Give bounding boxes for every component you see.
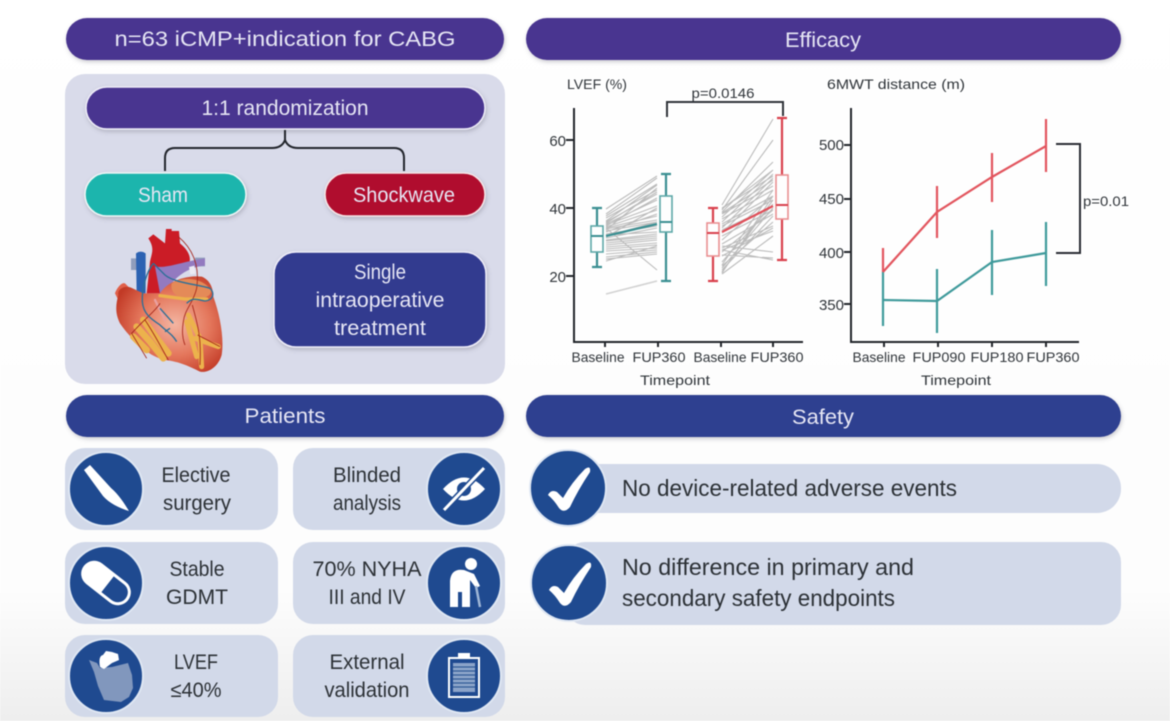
sham boxplots [591, 174, 672, 281]
chart: 6MWT distance [819, 76, 1129, 388]
chart title: LVEF (%) [567, 76, 627, 92]
safety item: no difference in endpoints: secondary safety endpoints [622, 585, 895, 611]
tile: elective surgery [65, 448, 278, 530]
tile: blinded analysis [293, 448, 505, 530]
y labels: 500 [819, 137, 844, 154]
safety item: no difference in endpoints: No difference in primary and [622, 554, 914, 580]
x labels: FUP360 [1026, 349, 1080, 365]
tile: LVEF threshold [65, 635, 278, 717]
tile: blinded analysis: Blinded [333, 464, 401, 487]
shockwave pill [325, 173, 485, 216]
shockwave boxplots [707, 118, 788, 281]
treatment box: treatment [334, 317, 426, 340]
heading: patients: Patients [244, 405, 326, 428]
individual patient lines [606, 119, 773, 294]
safety item: no device-related adverse events [530, 450, 1121, 526]
treatment box: intraoperative [316, 289, 444, 312]
treatment box: Single [354, 261, 406, 284]
y labels: 450 [819, 191, 844, 208]
significance bracket: p=0.0146 [692, 85, 755, 101]
significance bracket [667, 85, 783, 117]
significance bracket: p=0.01 [1083, 193, 1129, 209]
tile: stable GDMT: GDMT [166, 586, 228, 609]
sham series [883, 222, 1046, 333]
sham pill: Sham [138, 184, 188, 207]
icon: check mark [548, 468, 590, 511]
icon: scalpel [84, 465, 129, 511]
heading: population [66, 18, 504, 60]
shockwave pill: Shockwave [353, 184, 455, 207]
tile: blinded analysis: analysis [333, 492, 401, 515]
tile: NYHA class [293, 542, 505, 624]
y labels: 40 [549, 201, 566, 218]
x labels: FUP090 [912, 349, 966, 365]
icon: anatomical heart [115, 229, 222, 372]
y labels [549, 133, 566, 286]
x labels: Timepoint [921, 372, 991, 388]
significance bracket [1056, 144, 1129, 253]
tile: NYHA class: III and IV [328, 586, 406, 609]
icon: check mark [549, 563, 591, 606]
x labels [572, 349, 804, 388]
shockwave series [883, 119, 1046, 272]
x labels: Baseline [572, 349, 625, 365]
heading: efficacy [526, 18, 1121, 60]
icon: clipboard [449, 653, 479, 697]
axes [844, 108, 1079, 347]
x labels: Baseline [852, 349, 906, 365]
tile: stable GDMT: Stable [170, 558, 224, 581]
safety item: no difference in endpoints [531, 542, 1121, 625]
sham pill [85, 173, 246, 216]
tile: elective surgery: Elective [162, 464, 230, 487]
icon: crossed eye [443, 468, 485, 510]
tile: NYHA class: 70% NYHA [312, 558, 422, 581]
tile: elective surgery: surgery [163, 492, 231, 515]
x labels: FUP360 [750, 349, 804, 365]
heading: safety [526, 395, 1121, 437]
icon: grey heart [89, 651, 133, 702]
x labels: FUP180 [970, 349, 1024, 365]
heading: population: n=63 iCMP+indication for CABG [114, 28, 456, 51]
y labels: 350 [819, 297, 844, 314]
tile: external validation: validation [324, 679, 410, 702]
y labels: 60 [549, 133, 566, 150]
panel: randomization [65, 74, 505, 384]
safety item: no device-related adverse events: No device-related adverse events [622, 475, 957, 501]
randomization pill [86, 87, 485, 129]
icon: capsule [76, 556, 136, 610]
bracket connector [165, 130, 404, 171]
tile: stable GDMT [65, 542, 278, 624]
heading: safety: Safety [792, 406, 855, 429]
randomization pill: 1:1 randomization [202, 97, 368, 120]
heading: efficacy: Efficacy [785, 29, 862, 52]
x labels: FUP360 [632, 349, 686, 365]
x labels: Timepoint [640, 372, 710, 388]
tile: external validation: External [330, 651, 404, 674]
treatment box [274, 252, 486, 347]
y labels [819, 137, 844, 314]
heading: patients [66, 395, 504, 437]
chart title: 6MWT distance (m) [827, 76, 965, 92]
icon: elderly person with cane [450, 558, 480, 607]
x labels: Baseline [694, 349, 747, 365]
chart: LVEF boxplots [549, 76, 804, 388]
x labels [852, 349, 1080, 388]
y labels: 400 [819, 245, 844, 262]
tile: LVEF threshold: LVEF [174, 651, 218, 674]
y labels: 20 [549, 269, 566, 286]
tile: LVEF threshold: ≤40% [170, 679, 222, 702]
axes [566, 108, 803, 347]
tile: external validation [293, 635, 505, 717]
